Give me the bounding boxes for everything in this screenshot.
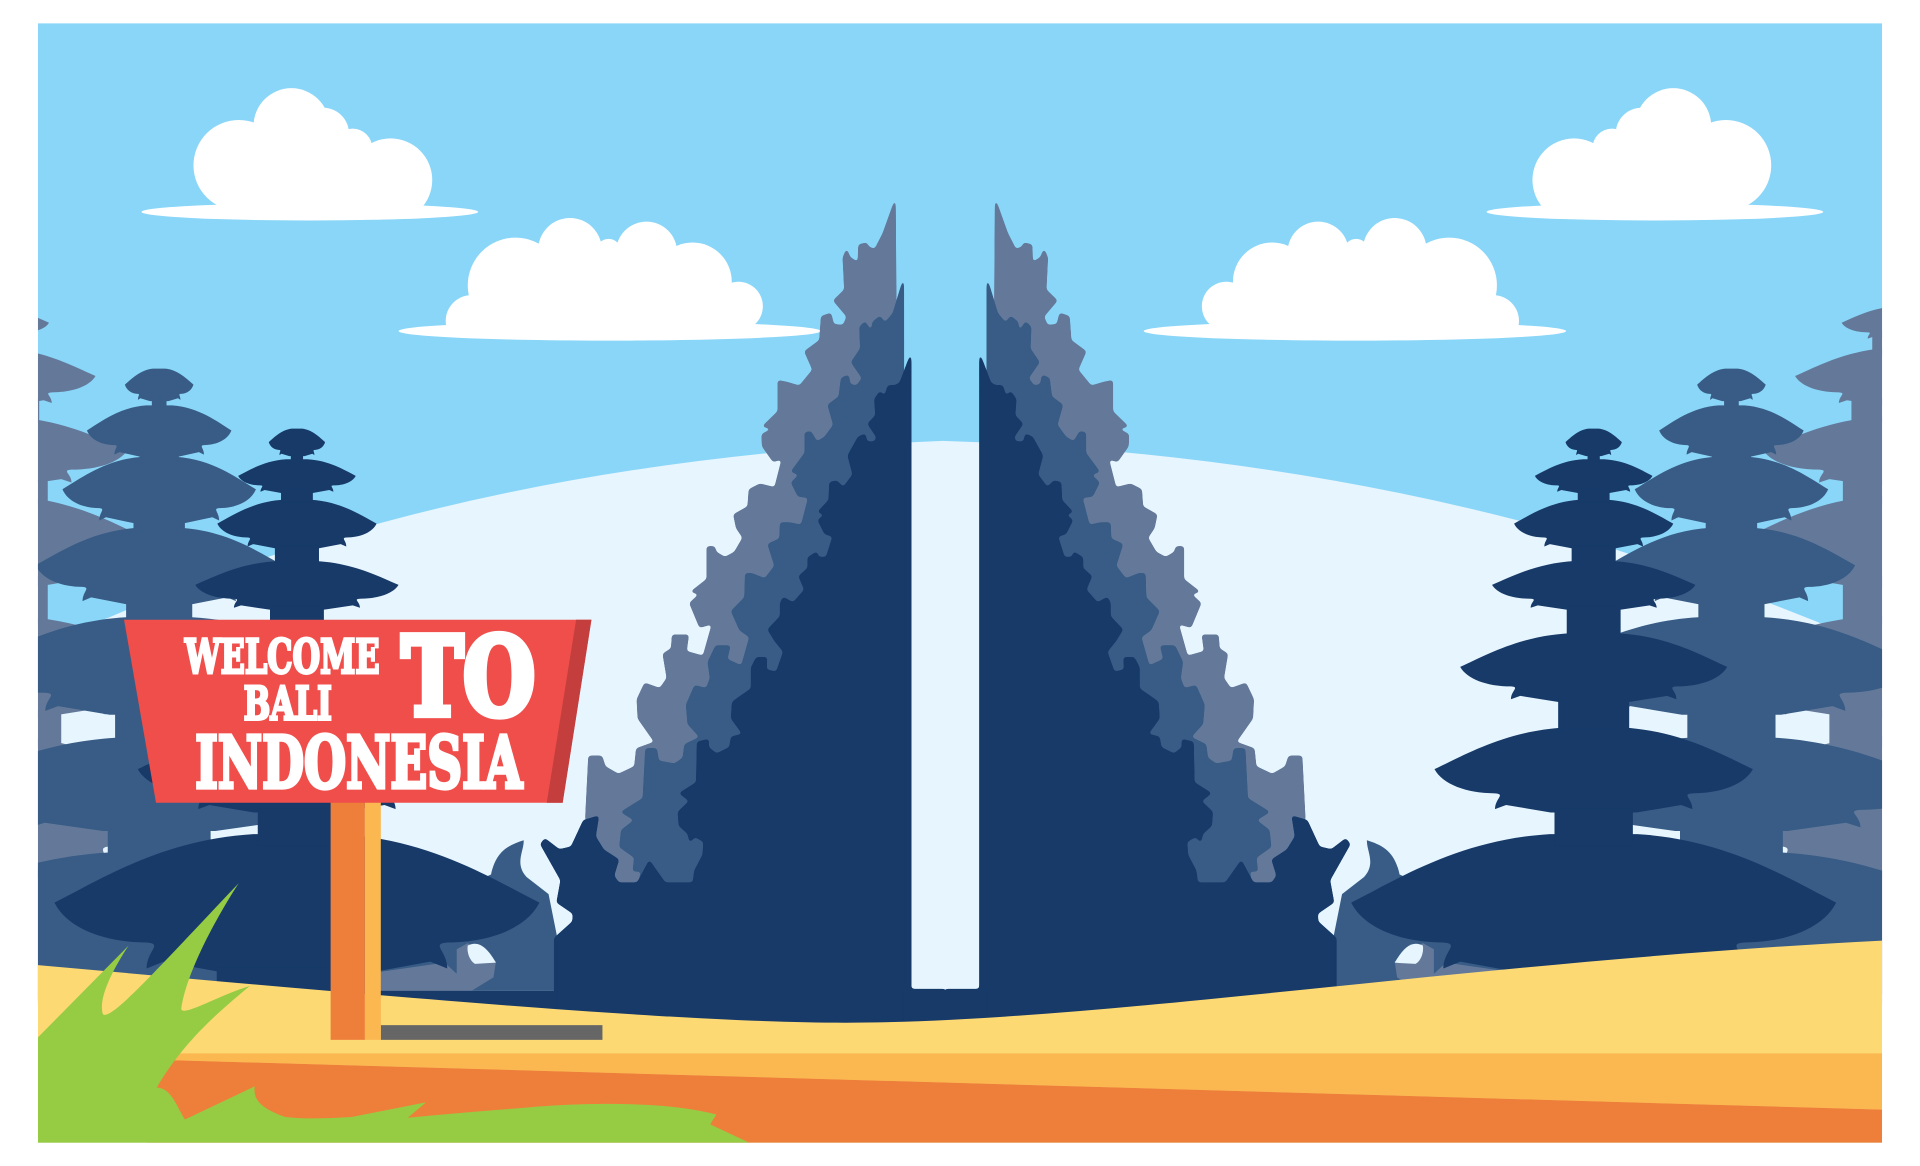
temple gate: left half: [306, 201, 945, 1040]
gate: dark front layer: [541, 355, 945, 1035]
pagoda tree: far right: [1702, 306, 1920, 1004]
gate: side wing, far layer: [367, 943, 496, 991]
post lit side: [365, 796, 381, 1040]
pagoda tree: front left: [54, 429, 539, 1023]
pagoda tree: middle right: [1450, 369, 1920, 1007]
gate: middle layer: [620, 280, 904, 894]
pagoda tree: far left: [38, 318, 126, 1004]
grass: [38, 883, 749, 1143]
temple gate: right half: [945, 201, 1584, 1040]
sign text: WELCOME: WELCOME: [184, 630, 380, 685]
board face: [124, 620, 591, 803]
sand ground: [38, 941, 1882, 1143]
gate: dark base under the wing: [380, 990, 554, 1009]
gate: side wing, middle layer: [367, 840, 558, 991]
grey kerb bar: [381, 1025, 602, 1040]
cloud: upper left: [141, 88, 478, 222]
signpost: [331, 796, 381, 1040]
sign text: TO: TO: [402, 615, 535, 741]
cloud: centre right: [1144, 218, 1566, 347]
gate: far layer: [586, 201, 900, 894]
gate: threshold below the central gap: [945, 990, 946, 991]
board side: [547, 620, 591, 803]
gate: side wing, pale gap: [468, 944, 496, 964]
sign text: INDONESIA: INDONESIA: [195, 721, 523, 805]
post shaded side: [331, 796, 365, 1040]
road: orange band: [147, 1059, 1882, 1143]
cloud: centre left: [399, 218, 821, 347]
cloud: upper right: [1487, 88, 1823, 222]
pagoda tree: front right: [1351, 429, 1836, 1023]
road: light band: [147, 1053, 1882, 1110]
pale distant hill: [38, 441, 1882, 1017]
sign text: BALI: BALI: [244, 677, 332, 731]
pagoda tree: middle left: [0, 369, 441, 1007]
sign board: [124, 615, 591, 805]
